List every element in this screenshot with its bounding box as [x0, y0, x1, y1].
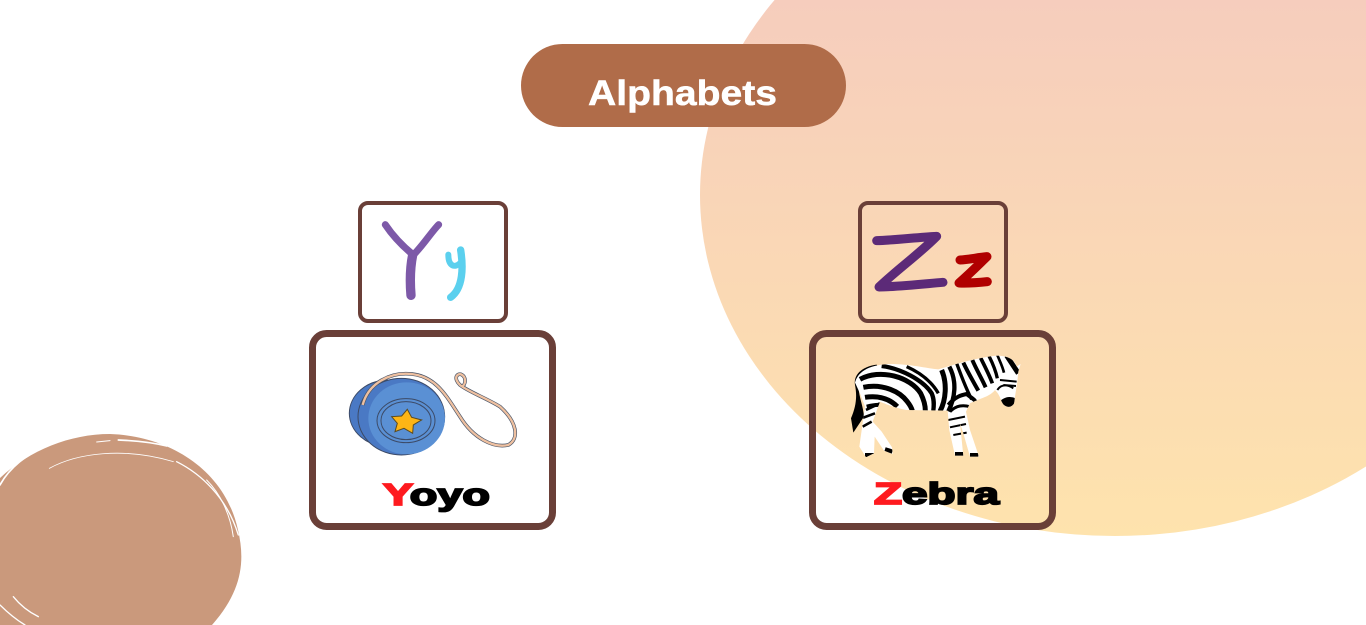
background: peach gradient circle	[700, 0, 1366, 536]
decorative brush blob bottom-left	[0, 434, 241, 625]
icon: zebra	[851, 355, 1021, 457]
panel: letter Y card	[360, 203, 506, 321]
icon: blue yoyo	[349, 374, 515, 455]
label: Zebra: Z ebra	[874, 476, 1000, 511]
panel: Yoyo card	[312, 334, 552, 526]
icon: handwritten Y y	[385, 225, 462, 297]
panel: Zebra card	[812, 334, 1052, 526]
title text: Alphabets	[588, 74, 777, 113]
icon: handwritten Z z	[877, 236, 987, 287]
title pill	[521, 44, 846, 127]
panel: letter Z card	[860, 203, 1006, 321]
label: Yoyo: Y oyo	[383, 477, 490, 512]
